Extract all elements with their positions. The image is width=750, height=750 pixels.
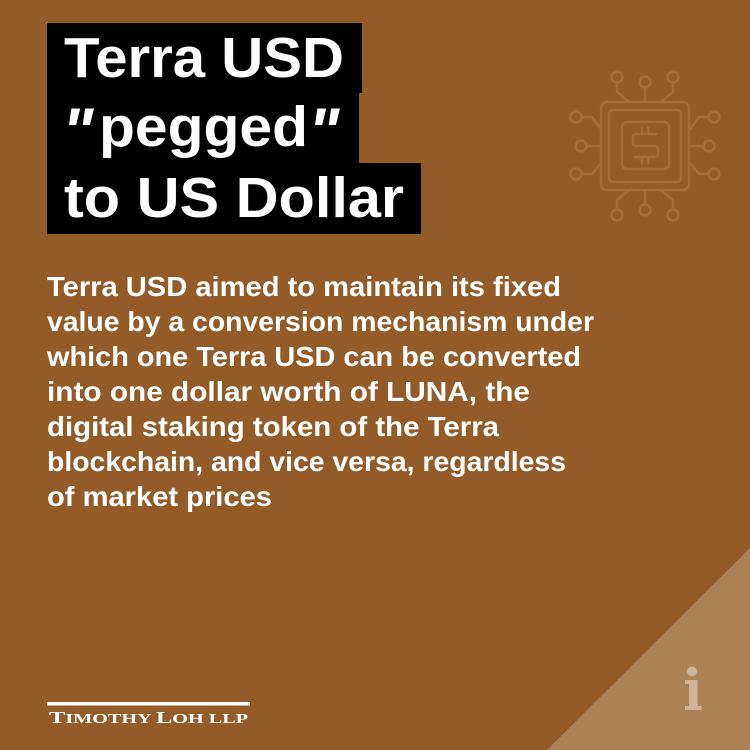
icon: cryptocurrency chip with dollar sign <box>570 72 720 220</box>
title block: " <box>308 94 340 168</box>
logo: Timothy Loh LLP <box>47 702 250 727</box>
body text <box>46 271 594 512</box>
body text: into one dollar worth of LUNA, the <box>47 376 530 407</box>
title block: pegged <box>99 95 308 159</box>
title block: " <box>62 94 94 168</box>
title block: Terra USD <box>64 26 344 90</box>
logo: Timothy Loh LLP: T IMOTHY L OH LLP <box>49 708 249 727</box>
body text: digital staking token of the Terra <box>47 411 499 442</box>
body text: Terra USD aimed to maintain its fixed <box>47 271 561 302</box>
corner triangle with info icon <box>547 548 750 750</box>
icon: letter i <box>685 666 702 710</box>
body text: value by a conversion mechanism under <box>47 306 594 337</box>
title block: to US Dollar <box>64 166 404 230</box>
title block <box>47 23 421 234</box>
body text: which one Terra USD can be converted <box>46 341 581 372</box>
body text: blockchain, and vice versa, regardless <box>47 446 566 477</box>
body text: of market prices <box>47 481 272 512</box>
